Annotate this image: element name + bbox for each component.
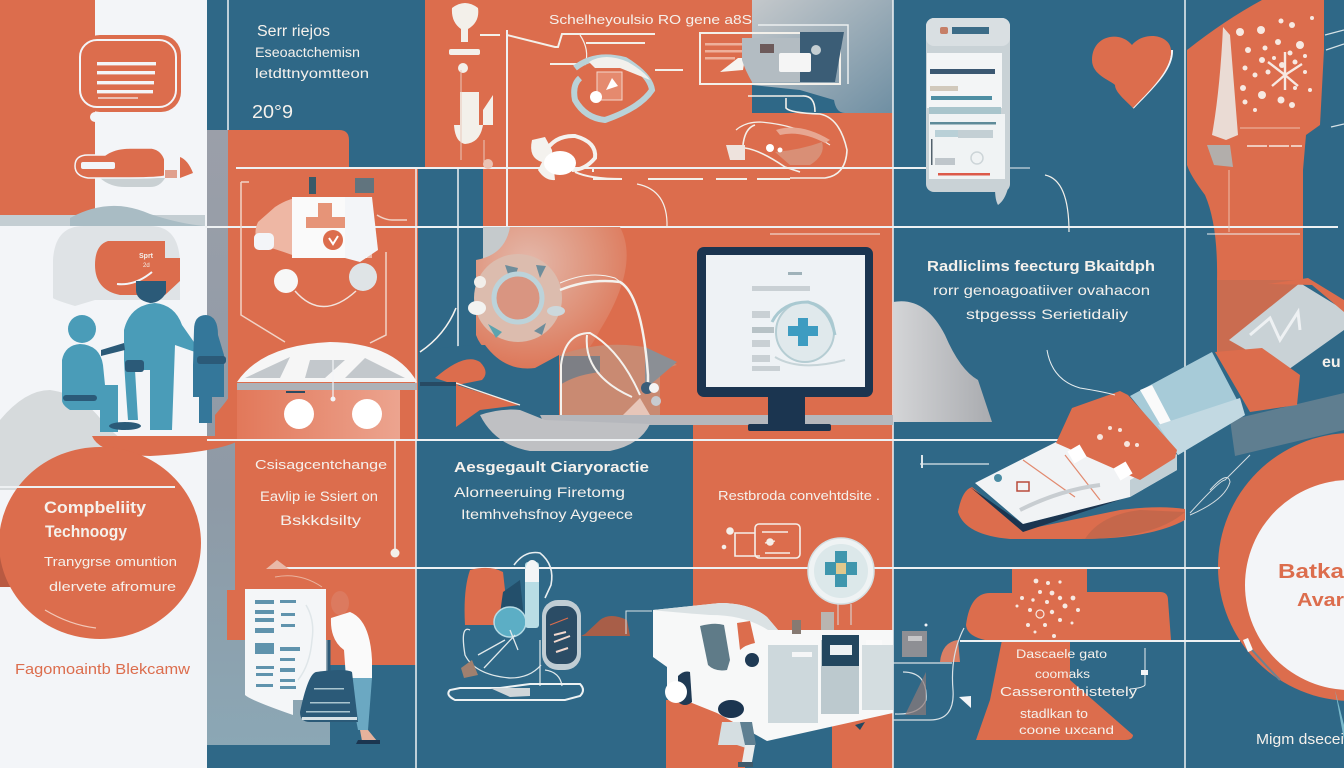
illustration: tubes and grey mound	[420, 275, 677, 415]
text block: orange panel: Eavlip ie Ssiert on	[260, 489, 378, 504]
icon: small label card	[722, 524, 800, 558]
text block: orange panel	[255, 457, 387, 528]
text block: cross caption	[1000, 649, 1138, 737]
text block: radlidims	[927, 258, 1155, 322]
text block: radlidims: stpgesss Serietidaliy	[966, 306, 1128, 322]
illustration: grey scanner behind people: 2d	[143, 263, 150, 269]
illustration: diagnostic device bottom	[448, 552, 652, 700]
illustration: grey scanner behind people: Sprt	[139, 253, 154, 260]
text block: cross caption: stadlkan to	[1020, 707, 1088, 721]
icon: ear-shaped device	[574, 57, 652, 120]
heading: top centre: Schelheyoulsio RO gene a8S	[549, 12, 752, 27]
text block: assessment characteristics	[454, 459, 649, 522]
text block: assessment characteristics: Itemhvehsfnoy Aygeece	[461, 507, 633, 522]
panel: left circle	[0, 447, 201, 639]
text block: radlidims: Radliclims feecturg Bkaitdph	[927, 258, 1155, 275]
text block: cross caption: coomaks	[1035, 669, 1090, 681]
title: top left block: letdttnyomtteon	[255, 66, 369, 81]
title: top left block: 20°9	[252, 102, 293, 122]
illustration: tubing device	[726, 96, 847, 178]
title: top left block: Eseoactchemisn	[255, 45, 360, 60]
illustration: tree of dots and white blade	[1207, 16, 1344, 234]
icon: headset loop	[531, 136, 622, 180]
text block: circle label: Batka	[1278, 561, 1344, 583]
illustration: small connector box	[893, 624, 1148, 720]
connector: strands by circle	[1190, 455, 1250, 515]
illustration: bird shape and grey band	[207, 359, 1060, 451]
illustration: three people	[62, 281, 226, 432]
illustration: tablet on hand	[958, 391, 1185, 539]
icon: monitor	[697, 247, 873, 431]
illustration: hospital equipment in orange panel	[241, 177, 407, 343]
panel: left column	[0, 0, 207, 768]
caption: bottom right: Migm dsecei	[1256, 731, 1344, 748]
panel: orange left block	[227, 130, 418, 665]
icon: capsule	[75, 148, 193, 187]
text block: compatibility technology	[44, 498, 177, 594]
icon: speech bubble with lines	[80, 35, 181, 122]
panel: orange cross	[966, 568, 1171, 740]
illustration: right grey mound	[893, 301, 992, 422]
text block: cross caption: Casseronthistetely	[1000, 685, 1138, 699]
illustration: circle highlights	[1243, 638, 1344, 740]
text block: compatibility technology: dlervete afromure	[49, 579, 176, 594]
text block: circle label	[1278, 561, 1344, 610]
text block: restbroda: Restbroda convehtdsite .	[718, 488, 880, 503]
panel: orange top block	[425, 0, 893, 440]
text block: orange panel: Bskkdsilty	[280, 513, 361, 528]
illustration: hand, sleeve and card	[1130, 278, 1344, 456]
panel: orange column centre	[666, 425, 893, 768]
icon: heart	[1092, 36, 1172, 108]
caption: orange label: Fagomoaintb Blekcamw	[15, 662, 191, 678]
illustration: gear on pale blob	[418, 227, 693, 440]
text block: orange panel: Csisagcentchange	[255, 457, 387, 472]
text block: radlidims: rorr genoagoatiiver ovahacon	[933, 282, 1150, 298]
text block: compatibility technology: Tranygrse omuntion	[44, 554, 177, 569]
connector: thin curve near sleeve	[1047, 350, 1115, 395]
text block: cross caption: Dascaele gato	[1016, 649, 1107, 661]
panel: orange body shape right	[1187, 0, 1324, 355]
icon: goblet stand	[449, 3, 493, 169]
arrow: small left pointer	[920, 455, 989, 468]
icon: phone screen	[926, 18, 1010, 205]
illustration: server rack and operator	[245, 548, 400, 744]
text block: assessment characteristics: Aesgegault Ciaryoractie	[454, 459, 649, 476]
illustration: orange pedestal under people	[92, 380, 240, 456]
icon: medical cross disc	[808, 538, 874, 625]
illustration: hand, sleeve and card: eu	[1322, 354, 1341, 371]
illustration: control panel top right	[700, 25, 848, 84]
text block: cross caption: coone uxcand	[1019, 723, 1114, 737]
illustration: white medical machine	[653, 603, 893, 741]
illustration: grey scanner behind people	[53, 226, 180, 306]
title: top left block: Serr riejos	[257, 23, 330, 40]
illustration: dome scanner	[237, 342, 417, 440]
text block: assessment characteristics: Alorneeruing Firetomg	[454, 484, 625, 500]
illustration: dots on cross	[1016, 579, 1080, 638]
illustration: grey hill	[0, 390, 175, 490]
text block: circle label: Avar	[1297, 590, 1344, 610]
panel: large circle right	[1218, 433, 1344, 701]
text block: compatibility technology: Technoogy	[45, 522, 127, 541]
title: top left block	[252, 23, 369, 122]
text block: compatibility technology: Compbeliity	[44, 498, 147, 517]
connector lines top	[480, 34, 1069, 234]
icon: small person at machine	[718, 700, 756, 767]
panel: grey strip	[207, 130, 330, 745]
